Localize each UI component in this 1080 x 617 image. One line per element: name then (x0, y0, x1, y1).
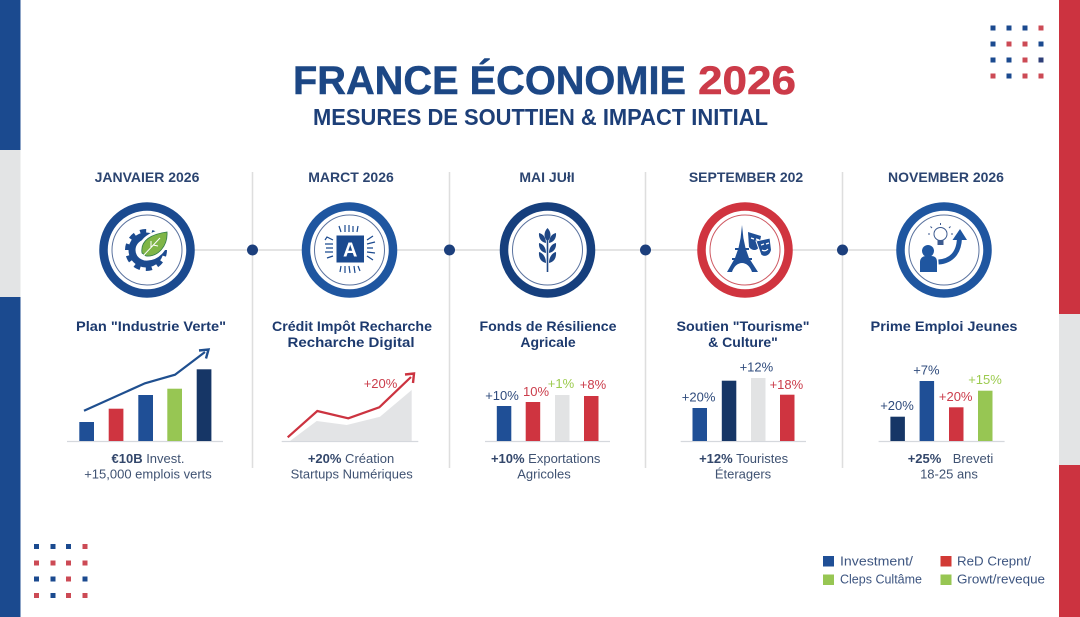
legend (823, 554, 1045, 586)
heading: fonds de resilience (480, 318, 617, 350)
chart: rising bars with arrow (67, 350, 223, 442)
icon: wheat (504, 206, 591, 294)
chart: four bars: +20% (880, 398, 914, 413)
panel: mars (272, 169, 432, 482)
caption: touristes: Éteragers (715, 466, 772, 482)
heading: prime emploi jeunes: Prime Emploi Jeunes (870, 318, 1018, 334)
subtitle: MESURES DE SOUTTIEN & IMPACT INITIAL (313, 104, 768, 130)
caption: startups (291, 451, 413, 482)
icon: gear and leaf (104, 206, 190, 294)
chart: area line rising (282, 374, 418, 442)
legend: Growt/reveque (957, 572, 1045, 586)
chart: four bars: +18% (770, 377, 804, 392)
caption: startups: +20% Création (308, 451, 394, 466)
legend: Cleps Cultâme (840, 572, 922, 586)
date: mai: MAI JUłI (519, 169, 575, 185)
date: septembre: SEPTEMBER 202 (689, 169, 803, 185)
chart: four bars: +8% (580, 377, 607, 392)
icon: AI chip (306, 206, 393, 294)
chart: area line rising: +20% (364, 376, 398, 391)
chart: four bars (681, 360, 806, 442)
heading: credit impot recherche: Recharche Digital (288, 334, 414, 350)
heading: soutien tourisme: Soutien "Tourisme" (676, 318, 810, 334)
panel: septembre (676, 169, 810, 482)
chart: four bars: +12% (740, 360, 774, 375)
caption: brevets: +25% (908, 451, 942, 466)
chart: four bars: +1% (548, 376, 575, 391)
title: FRANCE ÉCONOMIE (293, 58, 686, 103)
panel: mai (480, 169, 617, 482)
caption: brevets (908, 451, 993, 482)
icon: AI chip: A (343, 240, 357, 262)
date: mars: MARCT 2026 (308, 169, 394, 185)
icon: person, bulb and arrow (900, 206, 988, 294)
chart: four bars: +15% (968, 372, 1002, 387)
chart: four bars: +20% (682, 390, 716, 405)
chart: four bars: 10% (523, 384, 549, 399)
panel: janvier (67, 169, 226, 482)
heading: soutien tourisme: & Culture" (708, 334, 778, 350)
caption: touristes: +12% Touristes (699, 451, 789, 466)
caption: exportations: Agricoles (517, 466, 571, 482)
caption: investissement: +15,000 emplois verts (84, 466, 212, 482)
caption: investissement: €10B Invest. (112, 451, 184, 466)
panel: novembre (870, 169, 1018, 482)
caption: exportations: +10% Exportations (491, 451, 601, 466)
right tricolour band (1059, 0, 1080, 617)
heading: fonds de resilience: Fonds de Résilience (480, 318, 617, 334)
title: 2026 (698, 59, 796, 103)
heading: plan industrie verte: Plan "Industrie Verte" (76, 318, 226, 334)
heading: fonds de resilience: Agricale (520, 334, 576, 350)
chart: four bars (879, 363, 1005, 442)
date: janvier: JANVAIER 2026 (95, 169, 200, 185)
decorative dot grid: bottom left (34, 544, 88, 598)
heading: credit impot recherche (272, 318, 432, 350)
timeline axis and column dividers (190, 172, 900, 468)
caption: exportations (491, 451, 601, 482)
heading: soutien tourisme (676, 318, 810, 350)
chart: four bars (485, 376, 610, 442)
caption: brevets: 18-25 ans (920, 466, 978, 482)
caption: investissement (84, 451, 212, 482)
chart: four bars: +7% (913, 363, 940, 378)
heading: credit impot recherche: Crédit Impôt Recharche (272, 318, 432, 334)
caption: brevets: Breveti (953, 451, 993, 466)
legend: Investment/ (840, 554, 914, 568)
caption: startups: Startups Numériques (291, 466, 413, 482)
decorative dot grid: top right (990, 26, 1044, 78)
legend: ReD Crepnt/ (957, 554, 1032, 568)
date: novembre: NOVEMBER 2026 (888, 169, 1004, 185)
left tricolour band (0, 0, 20, 617)
chart: four bars: +10% (485, 388, 519, 403)
chart: four bars: +20% (939, 389, 973, 404)
icon: eiffel tower and masks (702, 206, 788, 294)
caption: touristes (699, 451, 789, 482)
